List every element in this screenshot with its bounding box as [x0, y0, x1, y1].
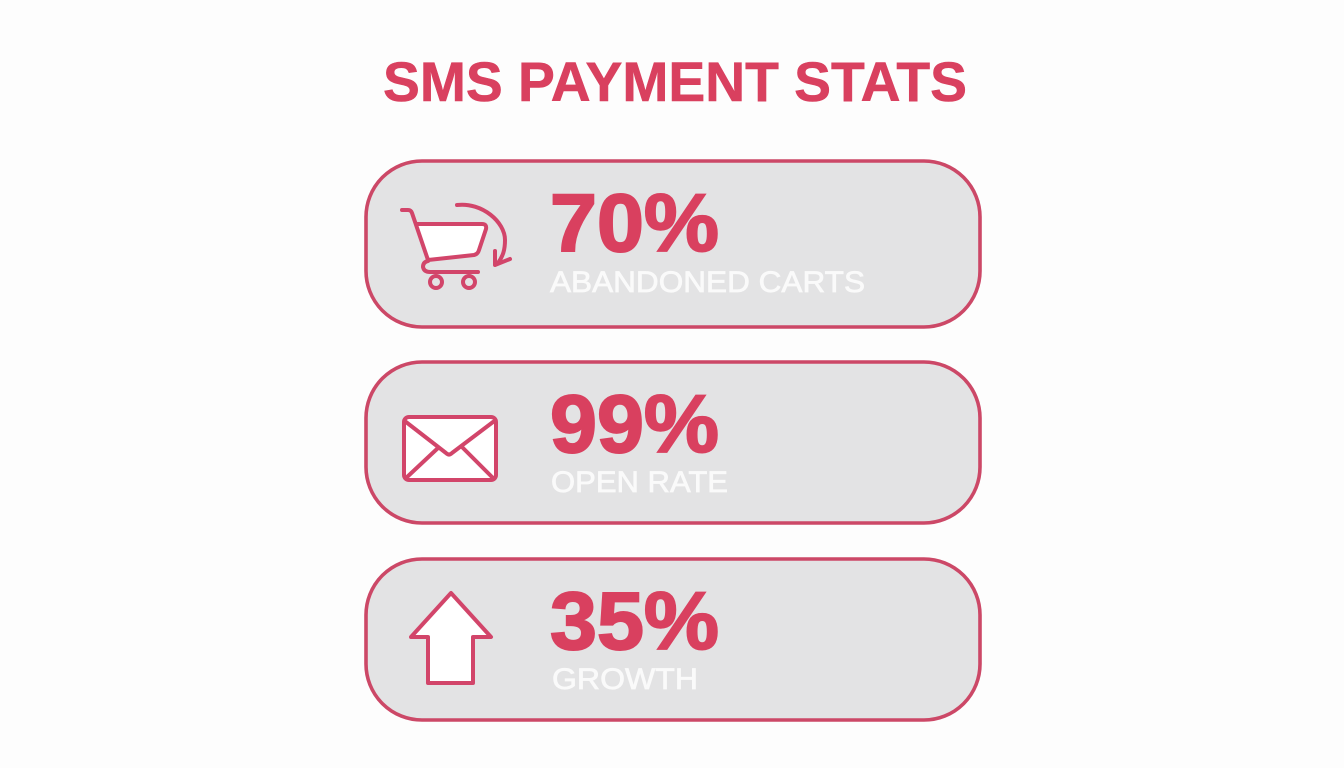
- title: SMS PAYMENT STATS: [383, 50, 967, 113]
- stat: 99%: 99%: [550, 379, 719, 470]
- panel: growth: [366, 559, 980, 720]
- icon: up arrow: [411, 593, 491, 683]
- label: growth: GROWTH: [552, 663, 698, 696]
- label: abandoned carts: ABANDONED CARTS: [550, 266, 865, 299]
- panel background 2: [366, 362, 980, 523]
- panel: open rate: [366, 362, 980, 523]
- stat: 35%: 35%: [550, 576, 719, 667]
- panel: abandoned carts: [366, 161, 980, 327]
- stat: 70%: 70%: [550, 178, 719, 269]
- panel background 3: [366, 559, 980, 720]
- icon: envelope: [404, 417, 496, 480]
- panel background 1: [366, 161, 980, 327]
- icon: shopping cart with return arrow: [402, 205, 510, 288]
- label: open rate: OPEN RATE: [551, 466, 728, 499]
